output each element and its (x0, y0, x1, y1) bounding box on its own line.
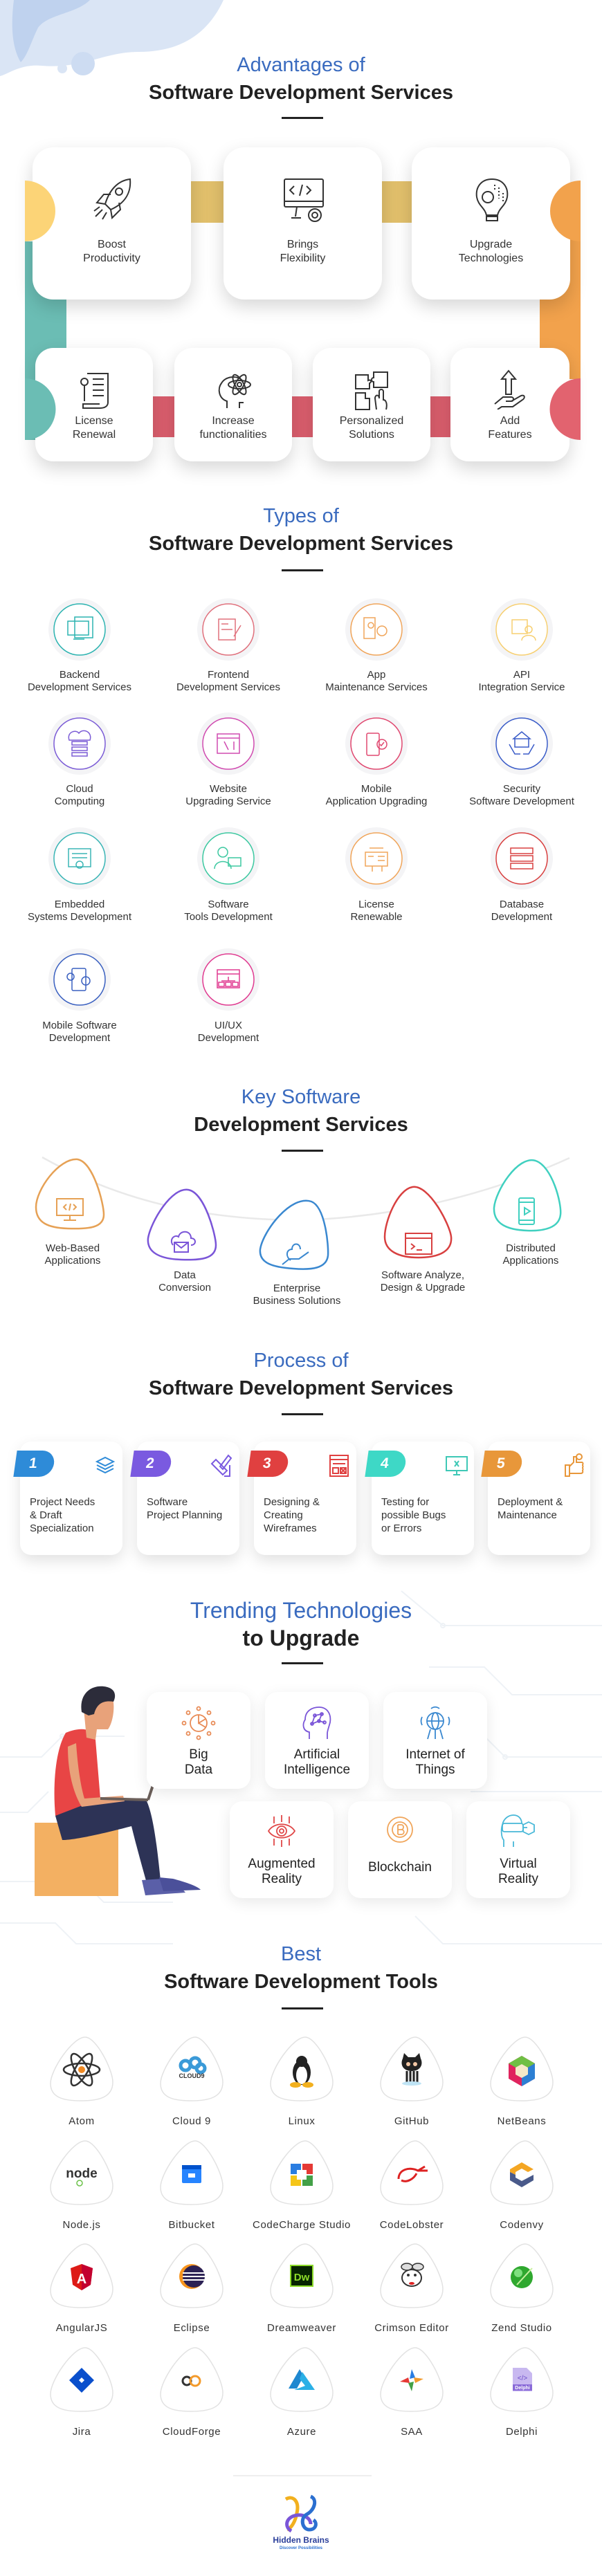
title: types: Types of (263, 505, 339, 527)
labels: types: Database (500, 899, 544, 910)
panel: advantage License Renewal (35, 348, 153, 461)
panel: process step 5: Deployment & (498, 1496, 563, 1508)
tool: Cloud 9: CLOUD9 (179, 2072, 205, 2079)
icon: bulb gear (476, 178, 508, 221)
title: advantages: Software Development Services (149, 82, 453, 104)
title: tools: Best (281, 1943, 321, 1965)
panel: process step 1: & Draft (30, 1509, 62, 1521)
icon: ai head (303, 1706, 331, 1739)
icon: monitor code (284, 178, 324, 222)
panel: trending Virtual Reality: Reality (498, 1872, 538, 1886)
labels: types (28, 669, 574, 1044)
panel: process step 1: Project Needs (30, 1496, 95, 1508)
title: types (149, 505, 453, 571)
labels: types: License (358, 899, 394, 910)
labels: types: App (367, 669, 385, 681)
panel: advantage Boost Productivity: Productivity (83, 252, 140, 264)
tool: Codenvy: Codenvy (500, 2219, 544, 2231)
icon: eye circuit (268, 1815, 295, 1847)
labels: key services: Conversion (158, 1282, 211, 1294)
panel: trending AI (265, 1692, 369, 1789)
tool: Crimson Editor: Crimson Editor (374, 2322, 449, 2334)
tool: CodeCharge Studio (250, 2137, 354, 2241)
panel: advantage Personalized Solutions (313, 348, 430, 461)
icon: layers (95, 1457, 115, 1473)
labels: types: Development Services (28, 681, 131, 693)
tool: Eclipse (140, 2241, 244, 2344)
panel: advantage License Renewal: Renewal (73, 429, 116, 441)
panel: trending IoT (383, 1692, 487, 1789)
grid: tools (50, 2036, 554, 2438)
labels: types: Development (491, 911, 552, 923)
tool: Node.js: Node.js (62, 2219, 101, 2231)
panel: trending Augmented Reality (230, 1801, 334, 1898)
labels: types: Cloud (66, 783, 93, 795)
labels: types: Upgrading Service (185, 795, 271, 807)
labels: key services: Design & Upgrade (381, 1282, 465, 1294)
tool: Delphi: Delphi (506, 2426, 538, 2438)
labels: types: Renewable (350, 911, 403, 923)
labels: key services: Web-Based (46, 1242, 100, 1254)
panel: trending AI: Intelligence (284, 1763, 350, 1777)
tool: Azure: Azure (287, 2426, 316, 2438)
labels: types: Computing (55, 795, 104, 807)
panel: process step 2 (137, 1442, 239, 1555)
panel: trending AI: Artificial (294, 1747, 340, 1762)
labels: types: Tools Development (184, 911, 273, 923)
tool: Atom (50, 2036, 113, 2127)
panel: trending Virtual Reality: Virtual (500, 1857, 537, 1871)
tool: Dreamweaver (250, 2241, 354, 2344)
panel: advantage Increase functionalities: functionalities (200, 429, 266, 441)
title: trending (190, 1598, 412, 1664)
title: process: Software Development Services (149, 1377, 453, 1399)
tool: Codenvy (470, 2137, 574, 2241)
tool: Node.js (50, 2140, 113, 2231)
panel: advantage Personalized Solutions: Solutions (349, 429, 394, 441)
icon: wireframe (329, 1455, 349, 1477)
decorative blob top-left (0, 0, 224, 76)
title: types: Software Development Services (149, 533, 453, 555)
tool: Bitbucket (140, 2137, 244, 2241)
panel: advantage Add Features (450, 348, 569, 461)
panel: trending Blockchain (348, 1801, 452, 1898)
panel: advantage Add Features: Add (500, 415, 520, 427)
tool: Atom: Atom (69, 2115, 95, 2127)
panel: advantage Upgrade Technologies: Technologies (459, 252, 523, 264)
tool: Crimson Editor (360, 2241, 464, 2344)
tool: Azure (250, 2344, 354, 2448)
labels: types: Software (208, 899, 249, 910)
panel: process step 5 (488, 1442, 590, 1555)
labels: types: Frontend (208, 669, 249, 681)
panel: trending Virtual Reality (466, 1801, 570, 1898)
title: trending: to Upgrade (243, 1626, 359, 1650)
tool: AngularJS: A (77, 2272, 86, 2287)
panel: advantage Upgrade Technologies (412, 147, 570, 300)
diagram: key services (35, 1157, 570, 1307)
icon: hand arrow (494, 369, 525, 410)
icon: monitor bug (446, 1456, 468, 1475)
panel: trending Augmented Reality: Augmented (248, 1857, 316, 1871)
labels: types: Website (210, 783, 247, 795)
illustration: person with laptop (35, 1686, 201, 1896)
panel: advantage Personalized Solutions: Personalized (340, 415, 403, 427)
tool: CodeCharge Studio: CodeCharge Studio (253, 2219, 351, 2231)
tool: Delphi: Delphi (515, 2386, 530, 2391)
panel: advantage Upgrade Technologies: Upgrade (470, 239, 512, 250)
icon: scroll (80, 373, 109, 409)
labels: types: Software Development (469, 795, 574, 807)
grid: types of services (28, 598, 574, 1044)
panel: process step 1: Specialization (30, 1522, 94, 1534)
decorative circuit background (0, 1591, 602, 1944)
labels: key services: Business Solutions (253, 1295, 340, 1307)
labels: key services: Enterprise (273, 1282, 320, 1294)
panel: advantage Boost Productivity (33, 147, 191, 300)
labels: types: Application Upgrading (326, 795, 427, 807)
panel: process step 3: Creating (264, 1509, 303, 1521)
title: process: Process of (253, 1350, 349, 1372)
icon: big data (181, 1706, 216, 1740)
labels: types: API (513, 669, 530, 681)
labels: types: Systems Development (28, 911, 131, 923)
icon: bitcoin (387, 1816, 413, 1843)
labels: types: Maintenance Services (325, 681, 428, 693)
tool: CodeLobster: CodeLobster (380, 2219, 444, 2231)
tool: Linux (270, 2036, 334, 2127)
tool: CloudForge: CloudForge (163, 2426, 221, 2438)
tool: AngularJS (30, 2241, 134, 2344)
icon: rocket (94, 178, 131, 220)
panel: advantage Boost Productivity: Boost (98, 239, 126, 250)
tool: CloudForge (140, 2344, 244, 2448)
tool: NetBeans (490, 2036, 554, 2127)
logo: Hidden Brains: Discover Possibilities (280, 2546, 322, 2550)
tool: AngularJS: AngularJS (56, 2322, 107, 2334)
tool: Bitbucket: Bitbucket (168, 2219, 215, 2231)
title: tools: Software Development Tools (164, 1971, 438, 1993)
labels: types: Development (198, 1032, 259, 1044)
panel: trending Blockchain: Blockchain (368, 1860, 432, 1875)
panel: advantage Increase functionalities (174, 348, 292, 461)
title: key services (194, 1086, 408, 1152)
panel: advantage Brings Flexibility (224, 147, 382, 300)
panel: trending Big Data: Big (189, 1747, 208, 1762)
panel: process step 2: Software (147, 1496, 188, 1508)
tool: Dreamweaver: Dreamweaver (267, 2322, 336, 2334)
labels: types: UI/UX (215, 1020, 242, 1031)
panel: process step 4 (372, 1442, 474, 1555)
logo: Hidden Brains: Hidden Brains (273, 2535, 329, 2545)
tool: NetBeans: NetBeans (498, 2115, 546, 2127)
tool: Linux: Linux (289, 2115, 315, 2127)
panel: advantage Add Features: Features (488, 429, 532, 441)
labels: types: Mobile (361, 783, 392, 795)
panel: trending Augmented Reality: Reality (262, 1872, 302, 1886)
labels: key services: Applications (45, 1255, 100, 1267)
title: advantages: Advantages of (237, 54, 365, 76)
panel: trending Big Data: Data (185, 1763, 212, 1777)
labels: key services: Distributed (506, 1242, 556, 1254)
tool: Eclipse: Eclipse (174, 2322, 210, 2334)
panel: trending IoT: Things (415, 1763, 455, 1777)
panel: advantage License Renewal: License (75, 415, 113, 427)
title: process (149, 1350, 453, 1415)
panel: process step 3: Designing & (264, 1496, 320, 1508)
icon: puzzle (355, 371, 388, 410)
tool: SAA: SAA (401, 2426, 423, 2438)
tool: SAA (360, 2344, 464, 2448)
title: tools (164, 1943, 438, 2009)
decorative half circles (25, 181, 581, 440)
tool: Cloud 9: Cloud 9 (172, 2115, 211, 2127)
panel: advantage Increase functionalities: Increase (212, 415, 255, 427)
tool: Delphi: </> (518, 2375, 527, 2382)
panel: advantage Brings Flexibility: Brings (287, 239, 318, 250)
tool: GitHub: GitHub (394, 2115, 429, 2127)
panel: process step 5: Maintenance (498, 1509, 557, 1521)
labels: types: Security (503, 783, 540, 795)
labels: types: Development Services (176, 681, 280, 693)
tool: Delphi (470, 2344, 574, 2448)
icon: globe signal (421, 1706, 450, 1739)
panel: process step 1: 1 (28, 1455, 38, 1471)
labels: types: Backend (60, 669, 100, 681)
panel: advantage Brings Flexibility: Flexibility (280, 252, 325, 264)
labels: key services: Applications (503, 1255, 558, 1267)
labels: types: Integration Service (478, 681, 565, 693)
connectors: advantages (25, 181, 581, 440)
tool: Jira: Jira (73, 2426, 91, 2438)
panel: process step 5: 5 (495, 1455, 506, 1471)
icon: head atom (219, 374, 251, 408)
tool: GitHub (380, 2036, 444, 2127)
tool: Jira (30, 2344, 134, 2448)
title: key services: Key Software (241, 1086, 361, 1108)
panel: process step 3 (254, 1442, 356, 1555)
panel: process step 2: 2 (145, 1455, 155, 1471)
labels: key services (44, 1242, 558, 1307)
panel: process step 3: 3 (262, 1455, 272, 1471)
labels: types: Mobile Software (42, 1020, 117, 1031)
panel: trending IoT: Internet of (405, 1747, 465, 1762)
panel: process step 4: possible Bugs (381, 1509, 446, 1521)
panel: process step 4: 4 (379, 1455, 390, 1471)
tool: Zend Studio: Zend Studio (491, 2322, 552, 2334)
title: trending: Trending Technologies (190, 1598, 412, 1623)
panel: process step 1 (20, 1442, 122, 1555)
icon: vr headset (501, 1814, 535, 1847)
labels: key services: Data (174, 1269, 196, 1281)
panel: process step 4: or Errors (381, 1522, 421, 1534)
panel: process step 4: Testing for (381, 1496, 429, 1508)
tool: Cloud 9 (160, 2036, 224, 2127)
title: advantages (149, 54, 453, 119)
icon: thumbs up tool (565, 1453, 584, 1477)
logo: Hidden Brains (259, 2494, 343, 2557)
labels: types: Development (49, 1032, 110, 1044)
labels: types: Embedded (55, 899, 104, 910)
tool: Dreamweaver: Dw (294, 2272, 310, 2283)
tool: Node.js: node (66, 2166, 98, 2181)
tool: Zend Studio (470, 2241, 574, 2344)
panel: trending Big Data (147, 1692, 250, 1789)
title: key services: Development Services (194, 1114, 408, 1136)
panel: process step 2: Project Planning (147, 1509, 222, 1521)
panel: process step 3: Wireframes (264, 1522, 317, 1534)
tool: CodeLobster (360, 2137, 464, 2241)
icon: ruler pencil (210, 1454, 232, 1477)
labels: key services: Software Analyze, (381, 1269, 464, 1281)
divider footer (233, 2475, 372, 2476)
